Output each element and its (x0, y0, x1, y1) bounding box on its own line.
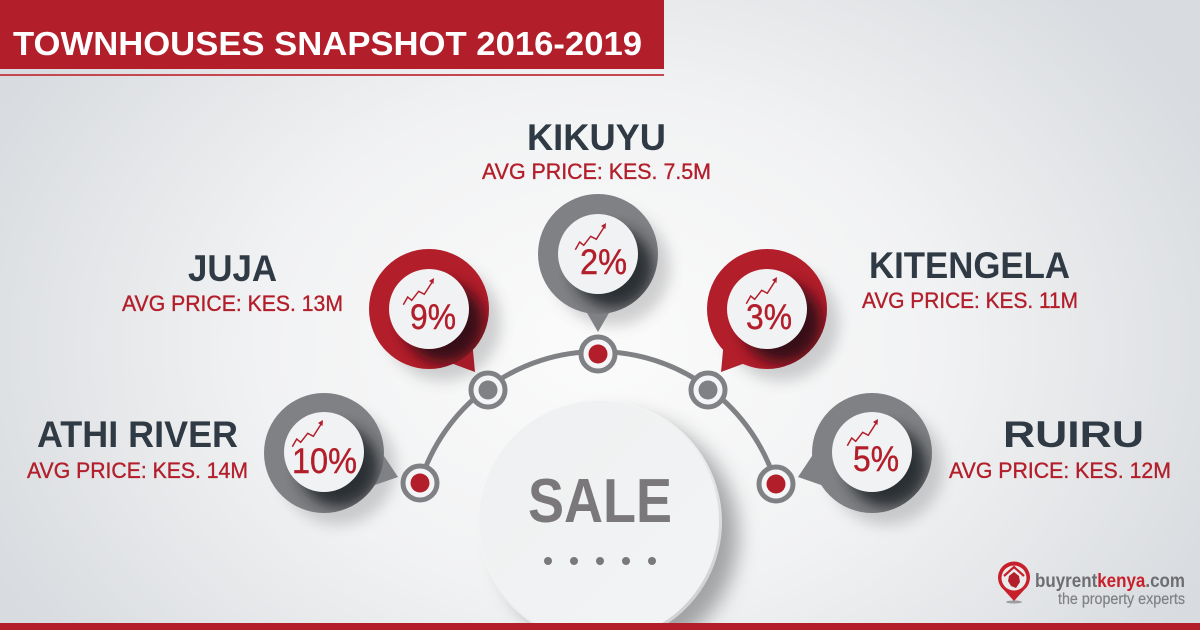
header banner (0, 0, 664, 76)
label: ruiru: AVG PRICE: KES. 12M (949, 458, 1171, 483)
bubble: juja 9% (369, 249, 501, 381)
bottom bar (0, 623, 1200, 630)
bubble: athi river 10% (264, 393, 398, 525)
label: kitengela: KITENGELA (869, 245, 1070, 286)
label: kikuyu: AVG PRICE: KES. 7.5M (482, 159, 711, 184)
label: ruiru: RUIRU (1003, 414, 1144, 455)
icon: trend arrow (847, 419, 878, 446)
label: athi river: AVG PRICE: KES. 14M (27, 458, 248, 483)
percent: 5% (853, 440, 899, 479)
node: juja (471, 373, 505, 407)
icon: map pin with house (998, 562, 1030, 604)
label: kikuyu: KIKUYU (527, 117, 666, 158)
header title: TOWNHOUSES SNAPSHOT 2016-2019 (13, 25, 642, 62)
bubble: kikuyu 2% (538, 194, 670, 332)
sale dots (544, 557, 656, 565)
percent: 2% (580, 243, 627, 282)
label: athi river: ATHI RIVER (37, 414, 238, 455)
label: kitengela: AVG PRICE: KES. 11M (862, 288, 1078, 313)
label: kikuyu (482, 117, 711, 184)
center sale disc (478, 400, 738, 630)
percent: 9% (410, 298, 456, 337)
icon: trend arrow (575, 223, 606, 250)
logo wordmark: buyrentkenya.com (1035, 570, 1185, 592)
logo tagline: the property experts (1058, 591, 1185, 608)
label: athi river (27, 414, 248, 483)
icon: trend arrow (746, 277, 777, 304)
bubble: kitengela 3% (707, 249, 839, 381)
label: juja: JUJA (188, 248, 277, 289)
label: juja: AVG PRICE: KES. 13M (122, 291, 343, 316)
icon: trend arrow (292, 420, 323, 447)
icon: trend arrow (403, 278, 434, 305)
node: ruiru (759, 467, 793, 501)
logo (998, 562, 1185, 608)
label: juja (122, 248, 343, 316)
node: kitengela (691, 373, 725, 407)
sale word: SALE (528, 467, 672, 536)
bubble: ruiru 5% (798, 393, 944, 525)
label: kitengela (862, 245, 1078, 313)
node: athi river (403, 466, 437, 500)
percent: 10% (292, 442, 357, 481)
percent: 3% (746, 298, 792, 337)
label: ruiru (949, 414, 1171, 483)
node: kikuyu (581, 337, 615, 371)
timeline arc (420, 351, 776, 484)
